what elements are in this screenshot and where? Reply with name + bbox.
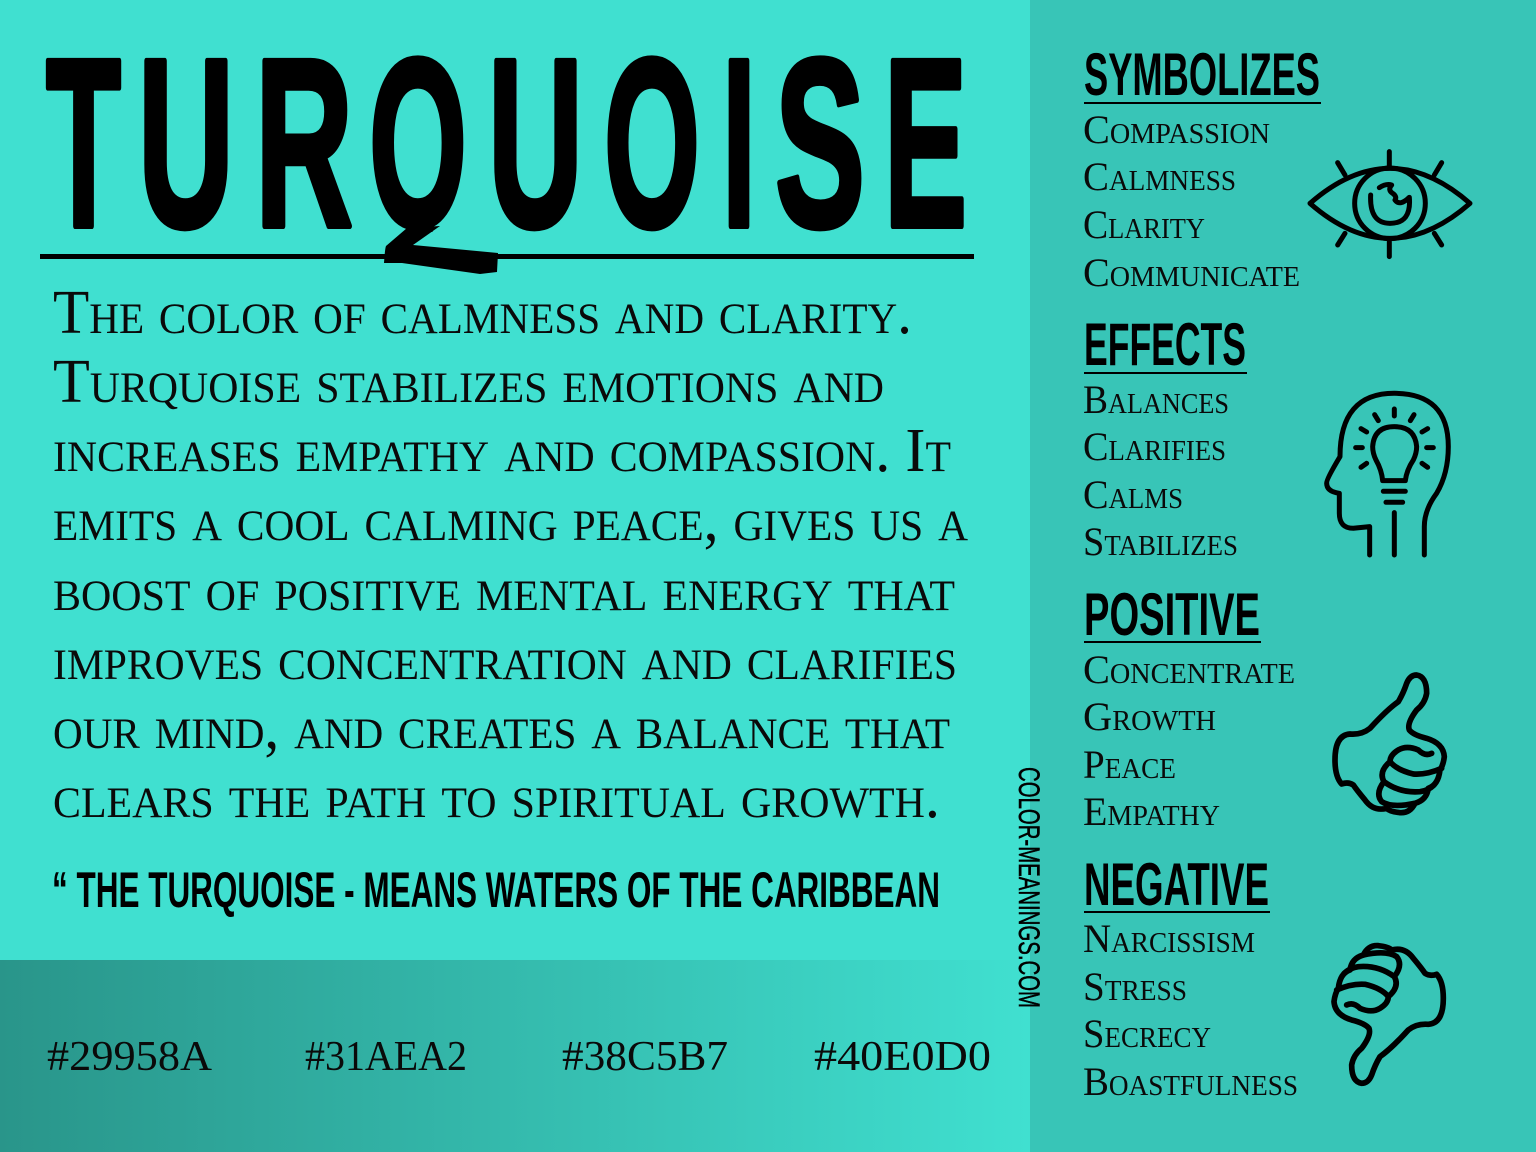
icon: thumbs down bbox=[1334, 946, 1443, 1083]
panel: positive bbox=[1083, 581, 1295, 834]
text block: description: our mind, and creates a balance that bbox=[53, 694, 950, 762]
title: T bbox=[46, 9, 121, 277]
title bbox=[46, 55, 964, 232]
panel: symbolizes: SYMBOLIZES bbox=[1084, 41, 1320, 108]
panel: symbolizes: Calmness bbox=[1083, 154, 1236, 199]
title: U bbox=[488, 9, 583, 277]
panel: negative bbox=[1083, 851, 1298, 1104]
panel: colour swatch gradient band bbox=[0, 960, 1030, 1152]
text block: description: improves concentration and clarifies bbox=[53, 625, 957, 693]
vertical credit: COLOR-MEANINGS.COM bbox=[1012, 767, 1045, 1008]
Q tail bbox=[384, 226, 498, 274]
panel: effects: Clarifies bbox=[1083, 424, 1226, 469]
panel: negative: Secrecy bbox=[1083, 1011, 1211, 1056]
panel: negative: Narcissism bbox=[1083, 916, 1255, 961]
hex codes: #38C5B7 bbox=[562, 1034, 728, 1080]
text block: description: Turquoise stabilizes emotions and bbox=[53, 348, 884, 416]
icon: eye bbox=[1310, 152, 1470, 257]
title: E bbox=[884, 9, 967, 277]
panel: negative: NEGATIVE bbox=[1084, 851, 1269, 918]
title: I bbox=[722, 9, 756, 277]
text block: description bbox=[53, 279, 968, 831]
panel: symbolizes bbox=[1083, 41, 1321, 295]
title: S bbox=[775, 9, 865, 277]
panel: positive: POSITIVE bbox=[1084, 581, 1260, 648]
panel: symbolizes: Clarity bbox=[1083, 202, 1205, 247]
panel: symbolizes: Communicate bbox=[1083, 250, 1300, 295]
quote: “ THE TURQUOISE - MEANS WATERS OF THE CARIBBEAN bbox=[52, 862, 940, 918]
hex codes bbox=[47, 1034, 991, 1080]
text block: description: emits a cool calming peace, gives us a bbox=[53, 486, 968, 554]
text block: description: increases empathy and compassion. It bbox=[53, 417, 951, 485]
hex codes: #29958A bbox=[47, 1034, 213, 1080]
text block: description: clears the path to spiritual growth. bbox=[53, 763, 940, 831]
panel: effects: EFFECTS bbox=[1084, 311, 1246, 378]
hex codes: #40E0D0 bbox=[814, 1034, 991, 1080]
panel: positive: Peace bbox=[1083, 742, 1176, 787]
panel: positive: Growth bbox=[1083, 694, 1216, 739]
title: O bbox=[604, 9, 700, 277]
title underline bbox=[40, 254, 974, 259]
hex codes: #31AEA2 bbox=[305, 1034, 467, 1080]
icon: thumbs up bbox=[1335, 675, 1444, 813]
text block: description: The color of calmness and clarity. bbox=[53, 279, 912, 347]
panel: right sidebar bbox=[1030, 0, 1536, 1152]
title: R bbox=[255, 9, 353, 277]
panel: effects bbox=[1083, 311, 1247, 564]
icon: head with light bulb bbox=[1327, 393, 1448, 555]
panel: effects: Stabilizes bbox=[1083, 519, 1238, 564]
panel: positive: Empathy bbox=[1083, 789, 1220, 834]
panel: effects: Calms bbox=[1083, 472, 1183, 517]
panel: symbolizes: Compassion bbox=[1083, 107, 1270, 152]
panel: negative: Stress bbox=[1083, 964, 1187, 1009]
panel: negative: Boastfulness bbox=[1083, 1059, 1298, 1104]
title: U bbox=[138, 9, 234, 277]
panel: effects: Balances bbox=[1083, 377, 1229, 422]
text block: description: boost of positive mental energy that bbox=[53, 556, 955, 624]
panel: positive: Concentrate bbox=[1083, 647, 1295, 692]
title: Q bbox=[369, 9, 467, 277]
